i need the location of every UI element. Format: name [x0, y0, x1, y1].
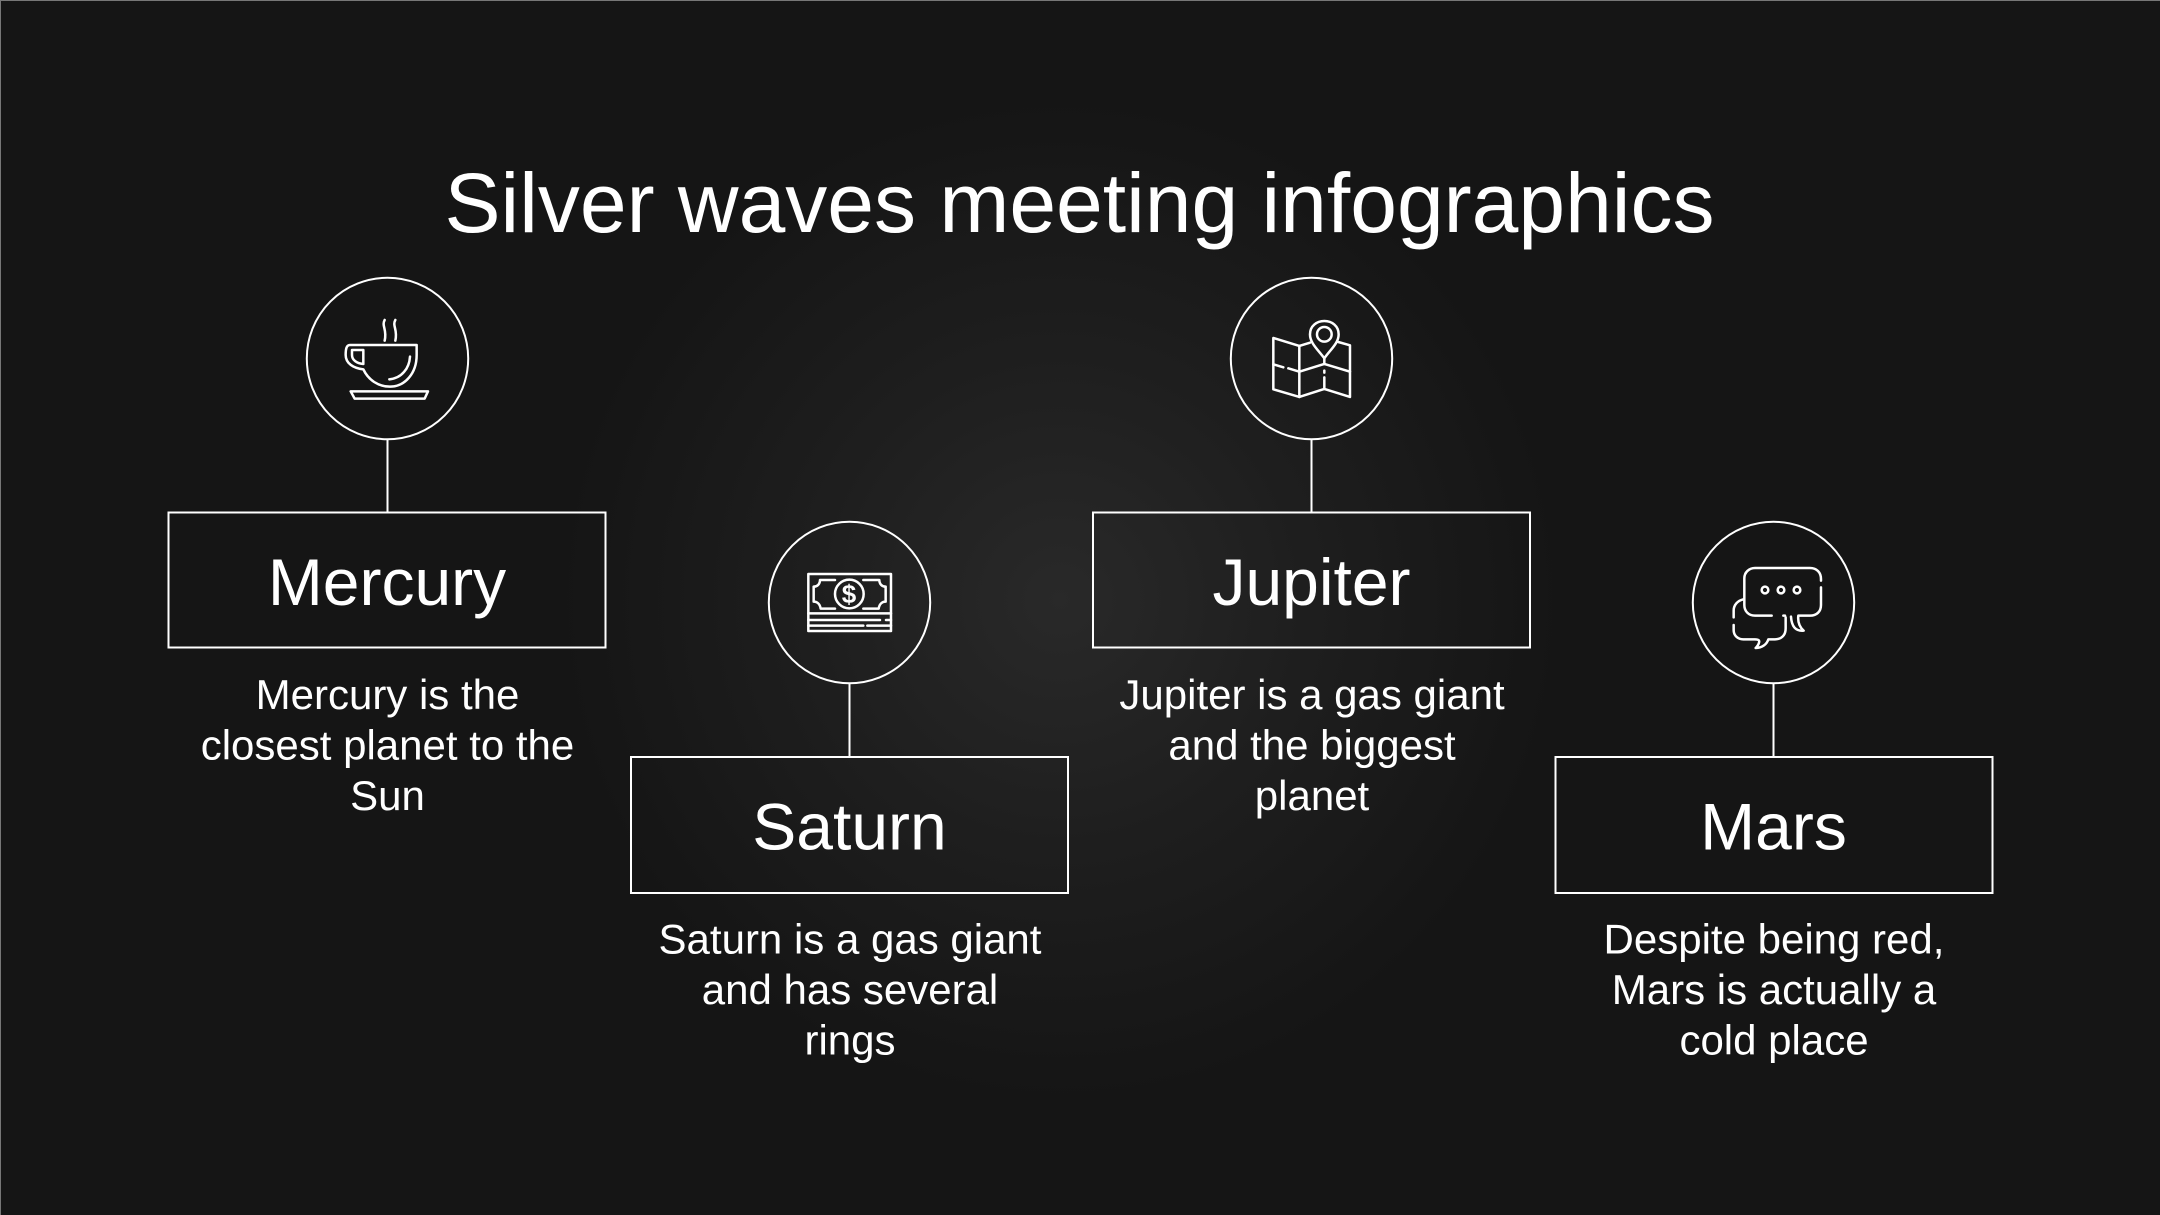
- name box: Saturn: [752, 790, 947, 864]
- connector: [386, 439, 388, 512]
- name box: Mars: [1700, 790, 1847, 864]
- dollar sign: $: [842, 579, 857, 609]
- name box: Mercury: [268, 545, 506, 619]
- name box: [168, 512, 606, 648]
- name box: Jupiter: [1212, 545, 1411, 619]
- description: planet: [1255, 772, 1370, 819]
- panel: Saturn: [631, 522, 1068, 1064]
- name box: [1093, 512, 1530, 648]
- description: [201, 671, 574, 819]
- icon: chat bubbles: [1693, 522, 1854, 683]
- panel: Mercury: [168, 278, 606, 819]
- description: closest planet to the: [201, 722, 574, 768]
- description: and the biggest: [1168, 722, 1456, 768]
- description: Despite being red,: [1604, 916, 1944, 962]
- title: Silver waves meeting infographics: [445, 156, 1714, 250]
- icon: map with pin: [1231, 278, 1392, 439]
- panel: Jupiter: [1093, 278, 1530, 819]
- description: and has several: [702, 966, 998, 1013]
- name box: [1556, 757, 1992, 893]
- panel: Mars: [1556, 522, 1992, 1064]
- description: cold place: [1679, 1016, 1869, 1064]
- description: Sun: [350, 772, 425, 819]
- description: Jupiter is a gas giant: [1119, 671, 1505, 718]
- connector: [1310, 439, 1312, 512]
- name box: [631, 757, 1068, 893]
- connector: [1772, 683, 1774, 757]
- description: rings: [804, 1016, 896, 1064]
- description: Mars is actually a: [1612, 966, 1937, 1013]
- description: [659, 916, 1042, 1064]
- icon: money: [769, 522, 930, 683]
- description: Mercury is the: [256, 671, 519, 718]
- description: Saturn is a gas giant: [659, 916, 1042, 962]
- description: [1604, 916, 1944, 1064]
- connector: [848, 683, 850, 757]
- icon: coffee cup: [307, 278, 468, 439]
- description: [1119, 671, 1505, 819]
